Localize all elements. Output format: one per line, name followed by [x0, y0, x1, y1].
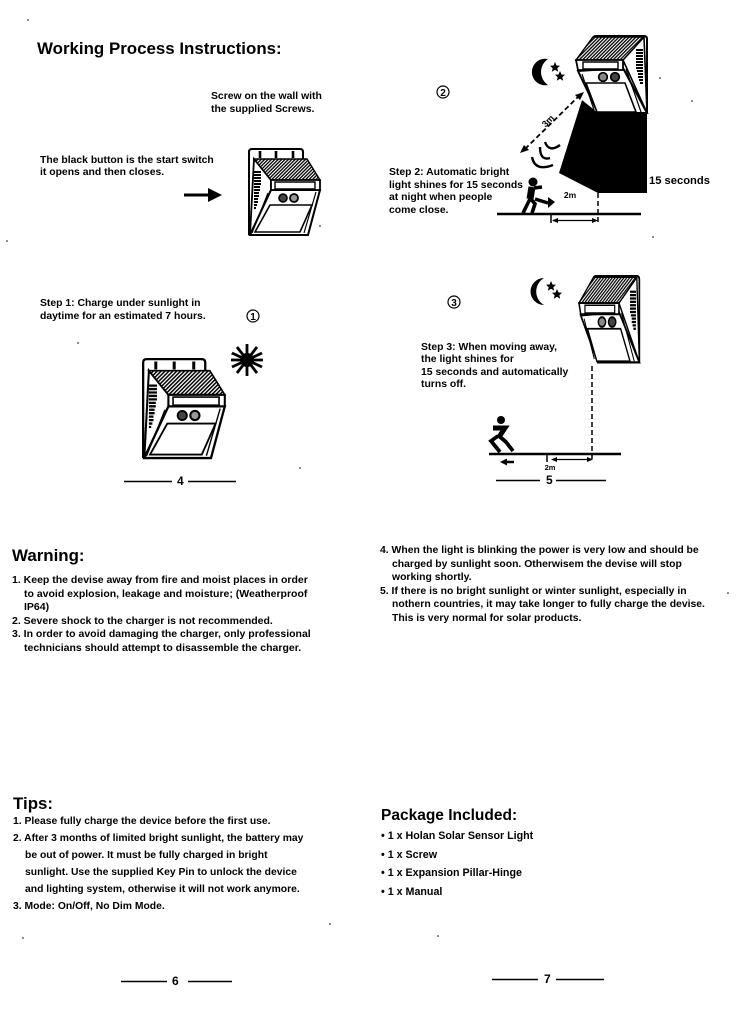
text: step 1	[40, 298, 206, 322]
page number 6: 6	[172, 974, 179, 988]
tips list: 3. Mode: On/Off, No Dim Mode.	[13, 901, 165, 912]
warning list: 2. Severe shock to the charger is not recommended.	[12, 615, 273, 627]
text: step 1: Step 1: Charge under sunlight in	[40, 298, 200, 309]
title: Working Process Instructions:	[37, 39, 282, 58]
warning list continued: This is very normal for solar products.	[392, 613, 581, 624]
tips list: be out of power. It must be fully charged in bright	[25, 850, 268, 861]
sensor waves	[532, 142, 560, 167]
text: screw instruction	[211, 91, 322, 115]
tips list: sunlight. Use the supplied Key Pin to unlock the device	[25, 867, 297, 878]
warning list: 1. Keep the devise away from fire and moist places in order	[12, 574, 308, 586]
dashed range arrow 3m	[520, 92, 584, 153]
ground and 2m dimension, step 3	[489, 454, 621, 472]
light beam	[559, 100, 647, 193]
dashed range arrow 3m: 3m	[540, 113, 556, 129]
text: start switch note: it opens and then closes.	[40, 167, 164, 178]
text: step 2: come close.	[389, 205, 448, 216]
icon: moon and stars, step 2	[532, 59, 565, 85]
person walking away	[491, 416, 513, 452]
icon: number 2: 2	[440, 88, 446, 99]
icon: moon and stars, step 3	[530, 278, 562, 305]
page number line: 7	[492, 978, 604, 980]
warning list continued	[380, 545, 705, 624]
device: intro wall light	[249, 149, 320, 235]
ground and 2m dimension, step 3: 2m	[545, 463, 556, 472]
icon: number 2	[437, 86, 449, 99]
text: step 3: the light shines for	[421, 354, 514, 365]
device: step 3 light	[579, 276, 639, 363]
package list: • 1 x Expansion Pillar-Hinge	[381, 867, 522, 879]
page number 7: 7	[544, 972, 551, 986]
warning list: 3. In order to avoid damaging the charger, only professional	[12, 628, 311, 640]
warning list	[12, 574, 311, 654]
package list	[381, 830, 534, 898]
text: start switch note	[40, 155, 214, 178]
text: step 2: at night when people	[389, 192, 492, 203]
warning list continued: 5. If there is no bright sunlight or winter sunlight, especially in	[380, 586, 687, 597]
text: step 3: turns off.	[421, 379, 466, 390]
ground and 2m dimension, step 2	[497, 190, 641, 224]
text: step 3: Step 3: When moving away,	[421, 342, 557, 353]
tips list: 2. After 3 months of limited bright sunlight, the battery may	[13, 833, 303, 844]
person walking toward light with arrow	[523, 178, 555, 213]
text: step 2: Step 2: Automatic bright	[389, 167, 509, 178]
text: screw instruction: Screw on the wall with	[211, 91, 322, 102]
icon: number 3: 3	[451, 298, 457, 309]
page number line: 4	[124, 480, 236, 482]
text: start switch note: The black button is the start switch	[40, 155, 214, 166]
warning list: technicians should attempt to disassemble the charger.	[24, 642, 301, 654]
text: step 3: 15 seconds and automatically	[421, 367, 568, 378]
warning list: IP64)	[24, 601, 49, 613]
heading: warning: Warning:	[12, 546, 85, 565]
text: screw instruction: the supplied Screws.	[211, 104, 314, 115]
heading: package included: Package Included:	[381, 807, 517, 824]
label: 15 seconds: 15 seconds	[649, 175, 710, 187]
warning list continued: working shortly.	[392, 572, 471, 583]
heading: tips: Tips:	[13, 794, 53, 813]
icon: number 3	[448, 296, 460, 309]
tips list: and lighting system, otherwise it will not work anymore.	[25, 884, 300, 895]
text: step 2	[389, 167, 523, 216]
warning list: to avoid explosion, leakage and moisture; (Weatherproof	[24, 588, 307, 600]
text: step 2: light shines for 15 seconds	[389, 180, 523, 191]
device: step 1 light	[143, 359, 225, 458]
package list: • 1 x Manual	[381, 886, 442, 898]
warning list continued: nothern countries, it may take longer to fully charge the devise.	[392, 599, 705, 610]
package list: • 1 x Holan Solar Sensor Light	[381, 830, 533, 842]
page number line: 5	[496, 480, 606, 482]
icon: number 1: 1	[250, 312, 256, 323]
icon: number 1	[247, 310, 259, 323]
page number 5: 5	[546, 473, 553, 487]
text: step 3	[421, 342, 568, 390]
tips list	[13, 816, 304, 912]
page number 4: 4	[177, 474, 184, 488]
warning list continued: 4. When the light is blinking the power is very low and should be	[380, 545, 699, 556]
device: step 2 light	[576, 36, 647, 114]
arrow: pointing to device	[184, 188, 222, 202]
dashed sensor limit line	[591, 366, 593, 462]
tips list: 1. Please fully charge the device before the first use.	[13, 816, 271, 827]
icon: sun	[231, 344, 263, 376]
warning list continued: charged by sunlight soon. Otherwisem the devise will stop	[392, 559, 682, 570]
package list: • 1 x Screw	[381, 849, 437, 861]
page number line: 6	[121, 980, 232, 982]
text: step 1: daytime for an estimated 7 hours.	[40, 311, 206, 322]
ground and 2m dimension, step 2: 2m	[564, 190, 577, 200]
